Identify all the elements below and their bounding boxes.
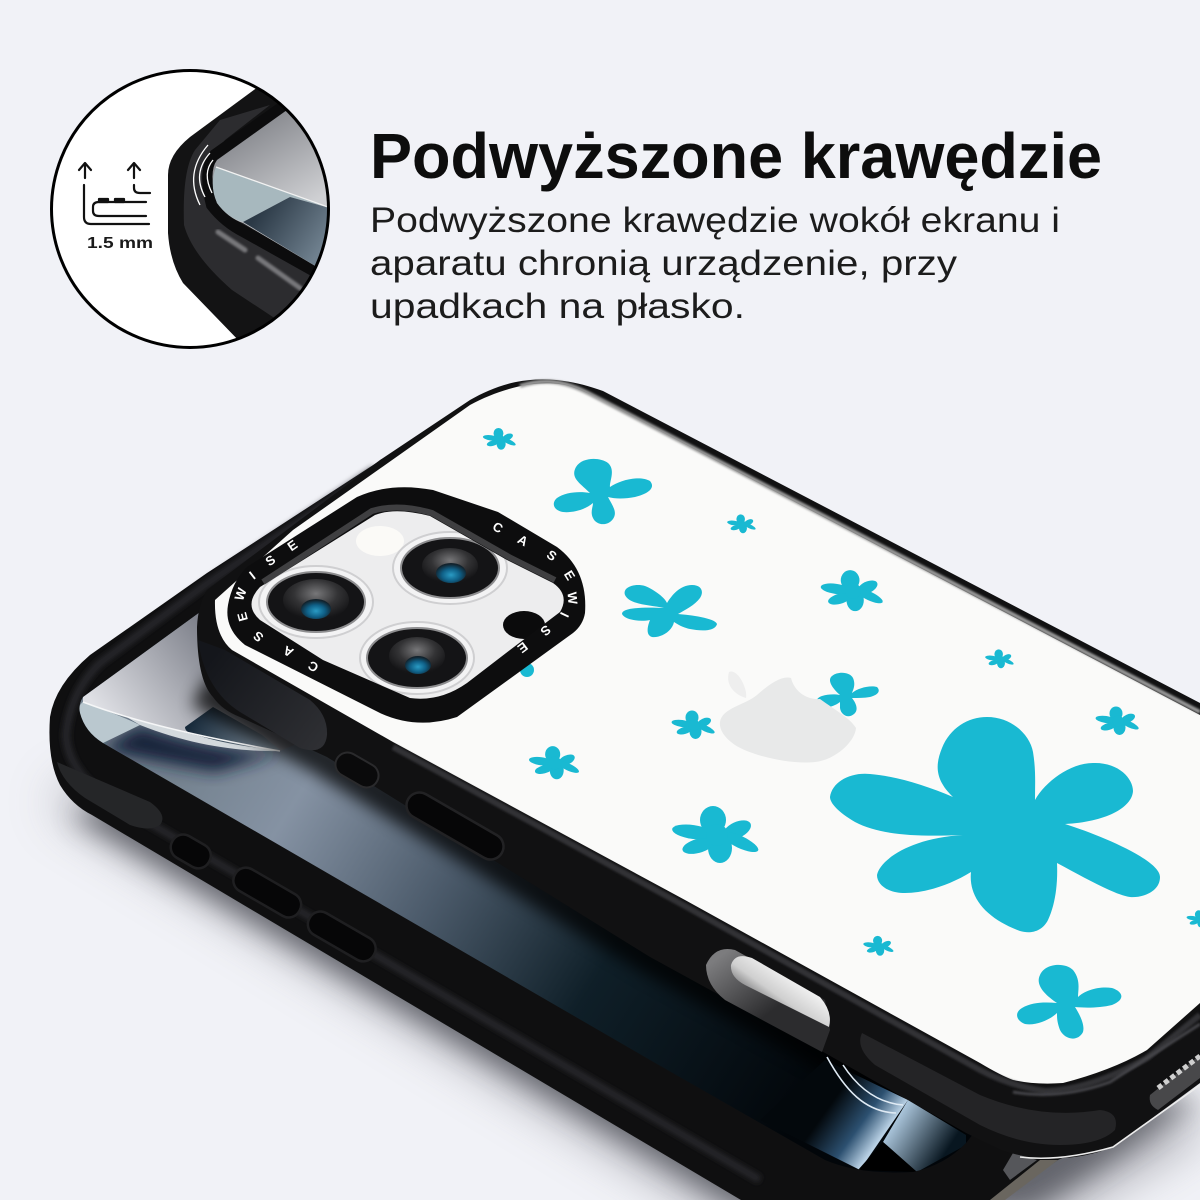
side button: action <box>166 830 215 873</box>
shadow from upper phone <box>184 671 834 1060</box>
small flower 3 <box>727 514 756 533</box>
body text <box>370 201 1060 326</box>
ring branding text: S <box>544 547 560 564</box>
grey wallpaper wedge <box>83 614 278 748</box>
apple leaf <box>728 672 746 698</box>
flower 10 <box>528 746 580 779</box>
lens glass <box>401 538 499 598</box>
screen pale blue <box>213 167 327 222</box>
camera lip <box>134 185 150 193</box>
rim pad at corner <box>860 1033 1116 1145</box>
camera bump <box>227 487 585 723</box>
ring branding text: C <box>490 519 506 537</box>
flower 5 <box>820 570 884 611</box>
lens inner cone <box>283 579 349 621</box>
lidar sensor <box>503 611 545 639</box>
white reflection lines <box>827 1057 903 1113</box>
heading: Podwyższone krawędzie <box>370 120 1102 192</box>
flower behind camera <box>520 663 534 677</box>
port speaker grille <box>1150 1055 1200 1110</box>
ring branding text: S <box>250 628 266 645</box>
ring branding text: S <box>537 622 554 639</box>
screen dark blue <box>243 197 330 267</box>
inner dark lip <box>202 142 314 275</box>
camera ring <box>227 487 585 723</box>
bottom edge strip <box>990 1160 1058 1200</box>
ring branding text: A <box>515 532 531 550</box>
body text: Podwyższone krawędzie wokół ekranu i <box>370 201 1060 240</box>
body text: aparatu chronią urządzenie, przy <box>370 244 958 283</box>
flower pattern <box>483 428 1200 1039</box>
silver highlight on bumper <box>218 232 300 288</box>
lens 2 <box>393 532 507 604</box>
small flower 7 <box>1095 706 1140 735</box>
camera window <box>252 511 564 699</box>
screen <box>79 613 972 1172</box>
raised edge icon <box>79 163 150 224</box>
lens surround <box>259 566 373 638</box>
tight contact shadow under phones <box>70 760 1200 1200</box>
lens inner cone <box>422 548 478 584</box>
ring branding text: I <box>246 568 258 582</box>
bottom port housing <box>1003 1153 1037 1180</box>
phone rim and side wall <box>197 379 1200 1158</box>
screen grey <box>212 110 335 267</box>
pale blue band <box>79 702 140 743</box>
ring branding text: I <box>557 610 572 620</box>
button cap <box>731 956 830 1027</box>
body text: upadkach na płasko. <box>370 287 745 326</box>
rim highlight <box>66 470 760 1180</box>
bumper lighter zone <box>184 105 310 318</box>
lower rim inner highlight <box>393 747 1200 1091</box>
circle fill <box>52 71 328 347</box>
curvature arcs <box>194 145 213 205</box>
flower 4 <box>622 585 717 637</box>
grille teeth <box>1158 1056 1200 1088</box>
ring branding text: E <box>234 610 251 623</box>
blue reflection left <box>806 1060 908 1170</box>
ring branding text: S <box>262 552 278 569</box>
right arrow <box>128 163 140 178</box>
lens glass <box>367 628 467 688</box>
flash <box>356 526 404 556</box>
small flower 9 <box>671 710 716 739</box>
button housing <box>706 949 830 1052</box>
carbon pad beneath camera <box>198 640 327 750</box>
camera bumps <box>99 199 124 202</box>
pale white strip <box>125 716 280 751</box>
soft wide shadow under phones <box>50 700 1200 1200</box>
apple body <box>720 677 856 763</box>
screen reflection line <box>216 167 328 207</box>
lens surround <box>393 532 507 604</box>
apple logo <box>720 672 856 763</box>
butterfly flower 8 <box>816 673 879 716</box>
lens surround <box>360 622 474 694</box>
silver side button <box>706 949 830 1052</box>
rim shine right corner <box>1013 1024 1200 1094</box>
rear-facing phone <box>197 379 1200 1158</box>
ring branding text: E <box>284 537 300 554</box>
inset circle: raised edge detail <box>52 70 345 348</box>
black triangle reflection <box>858 1142 917 1172</box>
small flower 6 <box>985 649 1014 668</box>
screen base panel <box>79 613 972 1172</box>
lens pupil <box>436 563 466 583</box>
thickness label: 1.5 mm <box>87 235 153 252</box>
side button: volume down <box>303 907 380 966</box>
phone outline <box>93 202 146 216</box>
inner ring wall shading <box>263 507 555 582</box>
case outer wall <box>84 185 149 224</box>
butterfly flower 13 <box>1017 965 1121 1039</box>
circle outline <box>52 70 328 348</box>
partial flower 14 <box>1186 910 1200 927</box>
dark notch <box>185 707 272 748</box>
ring branding text: E <box>514 639 531 656</box>
lens pupil <box>405 656 431 674</box>
lens 3 <box>360 622 474 694</box>
left arrow <box>79 163 91 178</box>
ring branding text: W <box>564 591 581 606</box>
side button: volume up <box>229 863 306 922</box>
phone body rim <box>49 458 1100 1200</box>
lens glass <box>267 572 365 632</box>
butterfly flower 2 <box>554 459 652 524</box>
white reflection curve <box>83 702 280 751</box>
dark panel corner <box>100 725 280 772</box>
bottom edge white reflection <box>1020 1085 1200 1158</box>
flower 11 <box>671 806 761 863</box>
lens inner cone <box>389 637 445 675</box>
ring branding text: W <box>231 585 250 603</box>
small flower 1 <box>483 428 517 450</box>
carbon corner pad <box>57 762 162 828</box>
lens pupil <box>301 599 331 619</box>
dark bumper <box>168 88 310 338</box>
ring branding text <box>231 519 581 675</box>
side power button <box>402 788 508 864</box>
lens 1 <box>259 566 373 638</box>
ring branding text: A <box>280 642 296 660</box>
speaker cutout <box>331 748 383 792</box>
grille housing <box>1150 1055 1200 1110</box>
grey inner bevel line <box>520 382 1200 712</box>
ring branding text: C <box>305 657 321 675</box>
ring branding text: E <box>561 568 578 583</box>
small flower 12 <box>863 936 894 956</box>
blue reflection right <box>883 1100 966 1172</box>
large flower <box>830 717 1160 932</box>
cropped phone corner <box>168 88 327 338</box>
front-facing phone <box>49 458 1100 1200</box>
back white surface <box>215 383 1200 1084</box>
